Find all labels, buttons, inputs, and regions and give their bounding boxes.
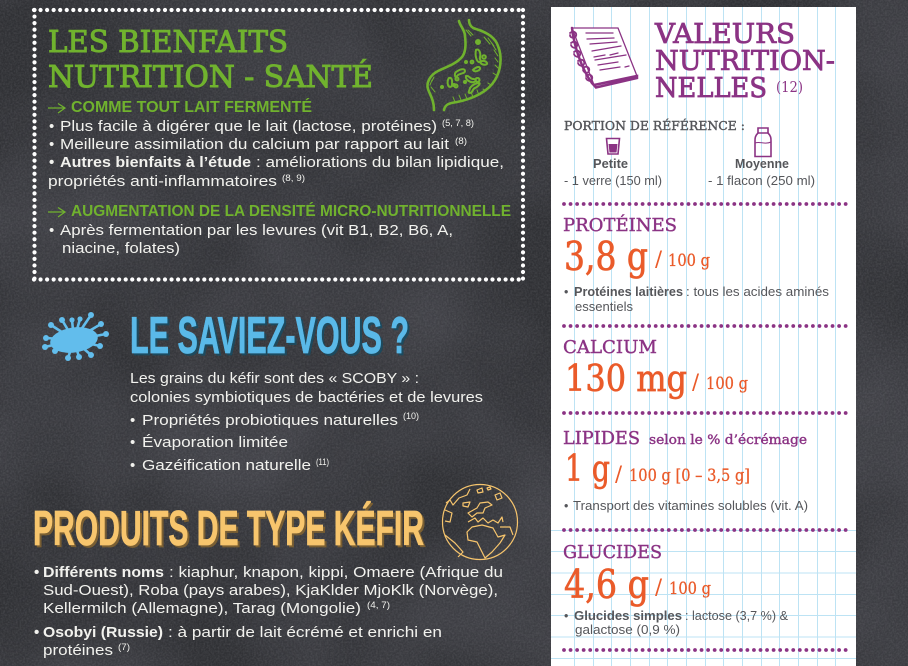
list: properties: •	[130, 434, 135, 451]
section: glucides: /	[655, 575, 663, 599]
section: glucides: : lactose (3,7 %) &	[685, 609, 789, 623]
text block: fermented milk benefits: •	[49, 154, 54, 171]
notebook paper	[551, 7, 856, 666]
section: protéines: •	[564, 285, 568, 299]
text block: osobyi	[34, 624, 442, 659]
list: properties: (10)	[403, 411, 419, 421]
section: lipides: selon le % d’écrémage	[649, 433, 807, 448]
panel: le saviez-vous	[42, 307, 483, 474]
text block: fermented milk benefits: •	[49, 136, 54, 153]
icon: glass	[606, 138, 620, 154]
text block: fermented milk benefits: (5, 7, 8)	[442, 118, 474, 128]
icon: notebook	[570, 28, 637, 88]
section: lipides: •	[564, 499, 568, 513]
heading: les bienfaits: LES BIENFAITS	[48, 25, 288, 60]
section: protéines: 3,8 g	[564, 235, 648, 280]
list: properties: (11)	[316, 457, 329, 467]
text block: other names: : kiaphur, knapon, kippi, Omaere (Afrique du	[169, 564, 503, 581]
text block: other names	[34, 564, 503, 617]
text block: osobyi: •	[34, 624, 39, 641]
section: protéines: : tous les acides aminés	[686, 285, 829, 299]
portion: moyenne	[708, 128, 815, 188]
subheading: comme tout lait fermenté: COMME TOUT LAIT FERMENTÉ	[71, 99, 312, 116]
section: glucides: 4,6 g	[564, 563, 649, 608]
list: properties: Propriétés probiotiques naturelles	[142, 412, 398, 429]
section: protéines: 100 g	[668, 251, 710, 271]
portion: petite	[564, 138, 662, 188]
section: lipides: LIPIDES	[563, 428, 640, 449]
icon: bacterium	[42, 312, 109, 361]
section: lipides: 100 g [0 – 3,5 g]	[629, 466, 750, 486]
panel: valeurs nutritionnelles	[551, 7, 856, 666]
arrow	[48, 104, 65, 113]
text block: after fermentation: Après fermentation par les levures (vit B1, B2, B6, A,	[60, 222, 453, 239]
list: properties: •	[130, 412, 135, 429]
icon: bottle	[755, 128, 771, 156]
icon: globe	[442, 484, 518, 560]
heading: produits de type kéfir: PRODUITS DE TYPE KÉFIR	[35, 504, 426, 558]
text block: after fermentation: niacine, folates)	[62, 240, 180, 257]
arrow	[48, 208, 65, 217]
section: protéines: essentiels	[575, 300, 633, 314]
section: lipides: Transport des vitamines solubles (vit. A)	[573, 499, 808, 513]
text block: osobyi: (7)	[118, 642, 130, 652]
text block: osobyi: : à partir de lait écrémé et enrichi en	[168, 624, 442, 641]
text block: other names: •	[34, 564, 39, 581]
text block: fermented milk benefits: (8, 9)	[282, 173, 305, 183]
list: properties: •	[130, 457, 135, 474]
text block: SCOBY: Les grains du kéfir sont des « SCOBY » :	[130, 370, 419, 387]
section: calcium: 130 mg	[565, 359, 687, 400]
panel: produits de type kéfir	[33, 484, 518, 659]
text block: other names: Kellermilch (Allemagne), Tarag (Mongolie)	[43, 600, 361, 617]
portion: petite: - 1 verre (150 ml)	[564, 174, 662, 188]
heading: le saviez-vous: LE SAVIEZ-VOUS ?	[130, 307, 409, 365]
text block: after fermentation: •	[49, 222, 54, 239]
section: lipides: /	[615, 462, 623, 486]
heading: produits de type kéfir: PRODUITS DE TYPE KÉFIR	[33, 502, 424, 556]
text block: other names: (4, 7)	[367, 600, 390, 610]
text block: fermented milk benefits: Plus facile à digérer que le lait (lactose, protéines)	[60, 118, 437, 135]
section: calcium	[563, 337, 748, 400]
section: glucides: galactose (0,9 %)	[575, 623, 680, 637]
panel: les bienfaits nutrition-santé	[34, 10, 523, 280]
section: protéines	[563, 213, 829, 314]
section: protéines: Protéines laitières	[574, 285, 683, 299]
heading: les bienfaits: NUTRITION - SANTÉ	[48, 59, 373, 95]
section: lipides	[563, 428, 808, 513]
text block: after fermentation	[49, 222, 453, 257]
heading: les bienfaits	[48, 25, 373, 95]
heading: portion de référence: PORTION DE RÉFÉRENCE :	[564, 118, 745, 133]
text block: SCOBY	[130, 370, 483, 406]
dotted frame	[34, 10, 523, 280]
text block: fermented milk benefits: propriétés anti-inflammatoires	[48, 173, 277, 190]
heading: le saviez-vous	[130, 307, 411, 367]
heading: valeurs nutritionnelles: (12)	[776, 78, 803, 96]
text block: fermented milk benefits	[48, 118, 504, 190]
icon: stomach	[427, 20, 501, 110]
section: glucides: GLUCIDES	[563, 542, 662, 563]
text block: fermented milk benefits: •	[49, 118, 54, 135]
heading: produits de type kéfir	[33, 502, 426, 558]
text block: fermented milk benefits: (8)	[455, 136, 467, 146]
section: calcium: CALCIUM	[563, 337, 657, 358]
section: glucides: 100 g	[669, 579, 711, 599]
section: glucides: •	[564, 609, 568, 623]
text block: fermented milk benefits: Autres bienfaits à l’étude	[60, 154, 251, 171]
heading: valeurs nutritionnelles: NELLES	[655, 73, 767, 104]
section: lipides: 1 g	[565, 449, 610, 490]
text block: osobyi: protéines	[43, 642, 113, 659]
list: properties: Évaporation limitée	[142, 434, 288, 451]
text block: other names: Différents noms	[43, 564, 164, 581]
section: glucides: Glucides simples	[574, 609, 682, 623]
text block: fermented milk benefits: Meilleure assimilation du calcium par rapport au lait	[60, 136, 450, 153]
section: protéines: /	[655, 247, 663, 271]
portion: petite: Petite	[593, 157, 628, 171]
section: calcium: /	[692, 370, 700, 394]
subheading: densité micro-nutritionnelle: AUGMENTATION DE LA DENSITÉ MICRO-NUTRITIONNELLE	[71, 203, 511, 220]
list: properties	[130, 411, 419, 474]
heading: valeurs nutritionnelles: VALEURS	[654, 19, 795, 50]
portion: moyenne: - 1 flacon (250 ml)	[708, 174, 815, 188]
section: calcium: 100 g	[706, 374, 748, 394]
section: protéines: PROTÉINES	[563, 213, 677, 236]
heading: le saviez-vous: LE SAVIEZ-VOUS ?	[132, 309, 411, 367]
text block: other names: Sud-Ouest), Roba (pays arabes), KjaKlder MjoKlk (Norvège),	[43, 582, 498, 599]
text block: fermented milk benefits: : améliorations du bilan lipidique,	[256, 154, 504, 171]
heading: valeurs nutritionnelles: NUTRITION-	[655, 46, 835, 77]
heading: valeurs nutritionnelles	[654, 19, 835, 104]
section: glucides	[563, 542, 789, 637]
portion: moyenne: Moyenne	[735, 157, 789, 171]
list: properties: Gazéification naturelle	[142, 457, 311, 474]
text block: osobyi: Osobyi (Russie)	[43, 624, 163, 641]
text block: SCOBY: colonies symbiotiques de bactéries et de levures	[130, 389, 483, 406]
